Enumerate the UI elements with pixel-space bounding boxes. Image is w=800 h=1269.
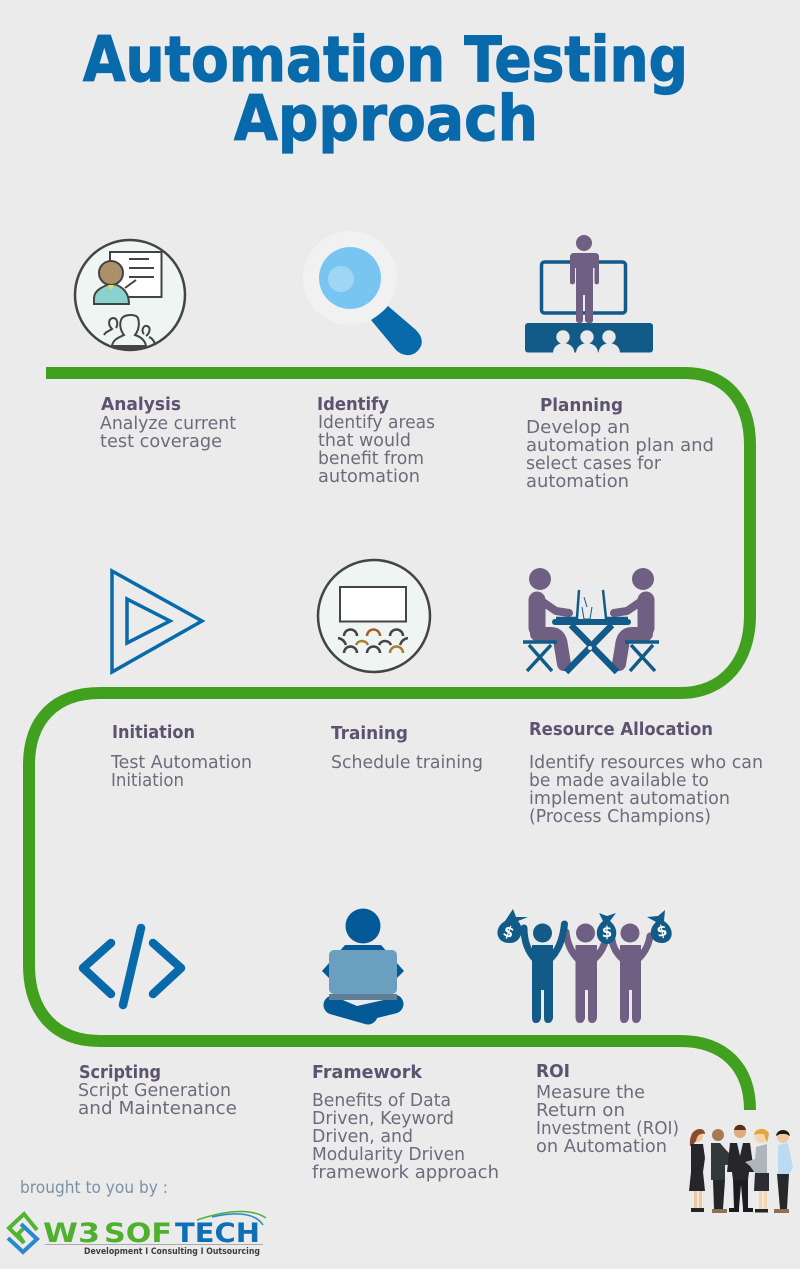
icon: planning presenter on stage [525,235,653,352]
logo: W3 Softech: TECH [175,1218,260,1249]
text: planning: automation plan and [526,436,714,456]
green winding path [29,373,750,1110]
text: training [331,723,483,773]
text: framework: Framework [312,1062,423,1083]
text: planning [526,395,714,492]
text: planning: Develop an [526,418,630,438]
figure: blonde woman [745,1129,769,1212]
text: identify: Identify [317,394,389,415]
text: analysis: Analyze current [100,414,236,434]
text: resource allocation: implement automation [529,789,730,809]
text: resource allocation: Identify resources who can [529,753,763,773]
text: framework: framework approach [312,1163,499,1183]
icon: business people group [689,1125,793,1213]
text: planning: automation [526,472,629,492]
text: initiation [110,722,252,791]
text: analysis: Analysis [101,394,181,415]
icon: ROI people with money bags: $ [501,922,517,942]
text: planning: select cases for [526,454,662,474]
text: framework: Driven, Keyword [312,1109,454,1129]
text: scripting: and Maintenance [78,1099,237,1119]
text: framework: Benefits of Data [312,1091,451,1111]
icon: play triangle [112,571,202,672]
text: analysis: test coverage [100,432,222,452]
icon: ROI people with money bags [497,909,672,1023]
text: framework: Driven, and [312,1127,413,1147]
icon: training room [318,560,430,672]
figure: man in blue shirt [774,1130,793,1213]
title: Approach [234,82,538,155]
icon: person with laptop [322,908,404,1015]
text: ROI: on Automation [536,1137,667,1157]
title: Automation Testing [83,23,688,96]
text: identify [317,394,435,487]
title [83,23,688,155]
logo: W3 Softech: W3 [43,1218,100,1249]
text: scripting: Script Generation [78,1081,231,1101]
icon: magnifying glass [303,231,422,355]
logo: W3 Softech: SOF [104,1218,172,1249]
logo: W3 Softech [8,1211,266,1257]
text: scripting [78,1062,237,1119]
text: framework [312,1062,499,1183]
text: resource allocation: be made available to [529,771,709,791]
text: analysis [100,394,236,452]
text: identify: that would [318,431,411,451]
text: training: Schedule training [331,753,483,773]
text: initiation: Initiation [112,722,195,743]
text: identify: Identify areas [318,413,435,433]
text: resource allocation: Resource Allocation [529,719,713,740]
text: brought to you by: brought to you by : [20,1178,168,1197]
text: identify: automation [318,467,420,487]
icon: code brackets [83,928,181,1005]
text: framework: Modularity Driven [312,1145,465,1165]
text: ROI [536,1061,679,1157]
logo: W3 Softech: Development I Consulting I Outsourcing [84,1247,260,1257]
icon: ROI people with money bags: $ [655,921,669,941]
text: ROI: Measure the [536,1083,645,1103]
text: ROI: ROI [536,1061,570,1082]
text: scripting: Scripting [79,1062,161,1083]
icon: ROI people with money bags: $ [602,923,612,941]
text: planning: Planning [540,395,623,416]
text: ROI: Return on [536,1101,625,1121]
text: identify: benefit from [318,449,424,469]
text: training: Training [331,723,408,744]
text: ROI: Investment (ROI) [536,1119,679,1139]
figure: woman in dark suit [689,1129,705,1212]
text: initiation: Test Automation [110,753,252,773]
text: initiation: Initiation [111,771,184,791]
figure: center man [727,1125,754,1212]
icon: two people at table [523,568,659,672]
text: resource allocation: (Process Champions) [529,807,711,827]
text: resource allocation [529,719,763,827]
figure: bald man [711,1129,737,1213]
icon: analysis presenter [75,240,185,350]
